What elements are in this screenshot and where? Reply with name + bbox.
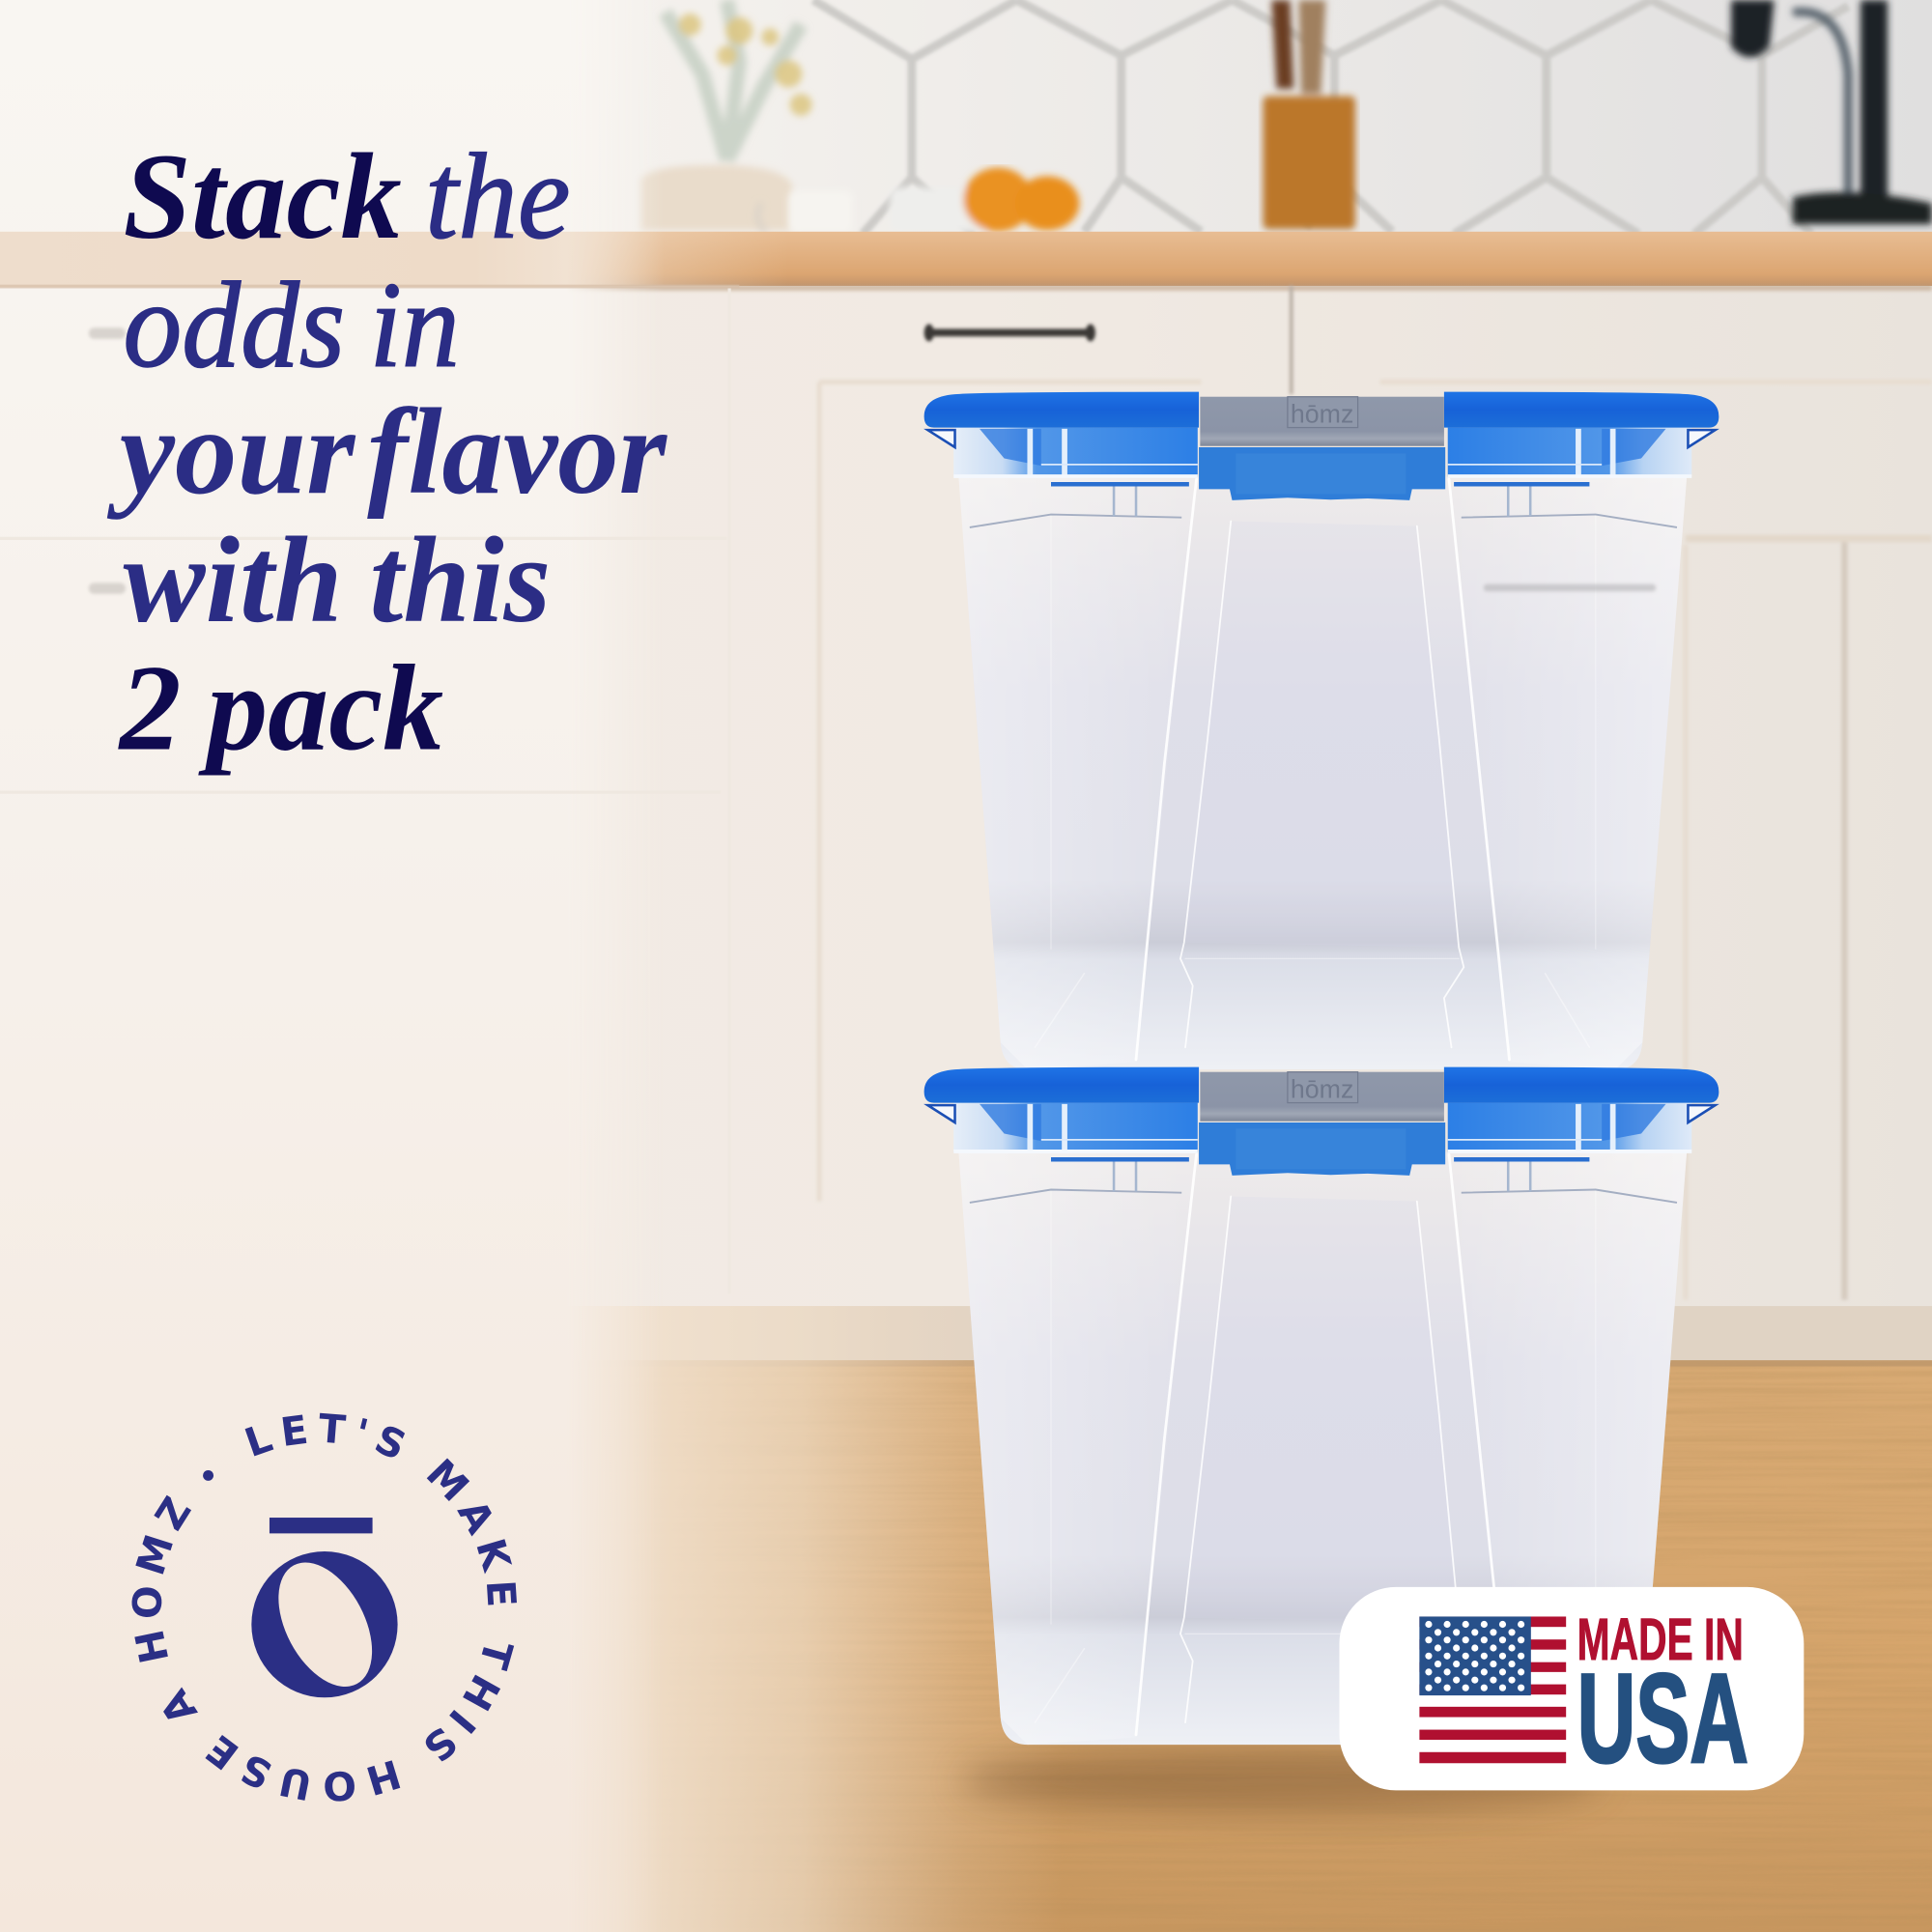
- background handle seen through top box: [1484, 584, 1656, 591]
- background: baseboard: [0, 1306, 1932, 1363]
- background: wooden floor: [0, 1360, 1932, 1932]
- badge text: made in: MADE IN: [1577, 1606, 1744, 1672]
- headline line 2: [124, 256, 460, 393]
- headline line 3: [107, 383, 668, 520]
- headline line 1: Stack: [124, 128, 402, 265]
- floor shadow under boxes: [961, 1748, 1602, 1812]
- storage box: bottom: [924, 1067, 1719, 1745]
- badge: made in USA: [1339, 1587, 1804, 1790]
- icon: drawer handle: [924, 324, 1095, 341]
- brand seal: [131, 1412, 517, 1802]
- headline line 1: [124, 128, 571, 265]
- headline: [107, 128, 668, 777]
- background: faucet: [1731, 0, 1932, 224]
- circular slogan: LET'S MAKE THIS HOUSE A HOMZ: [131, 1412, 517, 1802]
- headline line 5: 2: [118, 639, 182, 777]
- background: utensil holder: [1263, 0, 1355, 229]
- lid logo: homz: hōmz: [1291, 399, 1353, 428]
- headline line 1: the: [425, 128, 571, 265]
- headline line 2: in: [370, 256, 460, 393]
- headline line 2: odds: [124, 256, 345, 393]
- background: flowers and vase: [640, 0, 812, 231]
- headline line 5: pack: [197, 639, 443, 777]
- background: cabinets: [0, 285, 1932, 1309]
- headline line 3: your: [107, 383, 356, 520]
- headline line 4: with: [124, 511, 343, 648]
- background: wooden countertop: [0, 232, 1932, 287]
- logo overbar: [270, 1518, 373, 1533]
- badge text: USA: USA: [1577, 1647, 1748, 1789]
- logo ring: [251, 1551, 398, 1697]
- background: cups and oranges: [757, 167, 1079, 233]
- storage box: top: [924, 392, 1719, 1069]
- lid logo: homz: hōmz: [1291, 1074, 1353, 1103]
- headline line 4: this: [370, 511, 551, 648]
- headline line 4: [124, 511, 551, 648]
- headline line 3: flavor: [367, 383, 668, 520]
- logo ring opening: [259, 1547, 391, 1702]
- background: kitchen wall: [0, 0, 1932, 241]
- slogan dot: [203, 1470, 213, 1481]
- left fade overlay: [0, 232, 1023, 1932]
- icon: American flag: [1419, 1616, 1566, 1763]
